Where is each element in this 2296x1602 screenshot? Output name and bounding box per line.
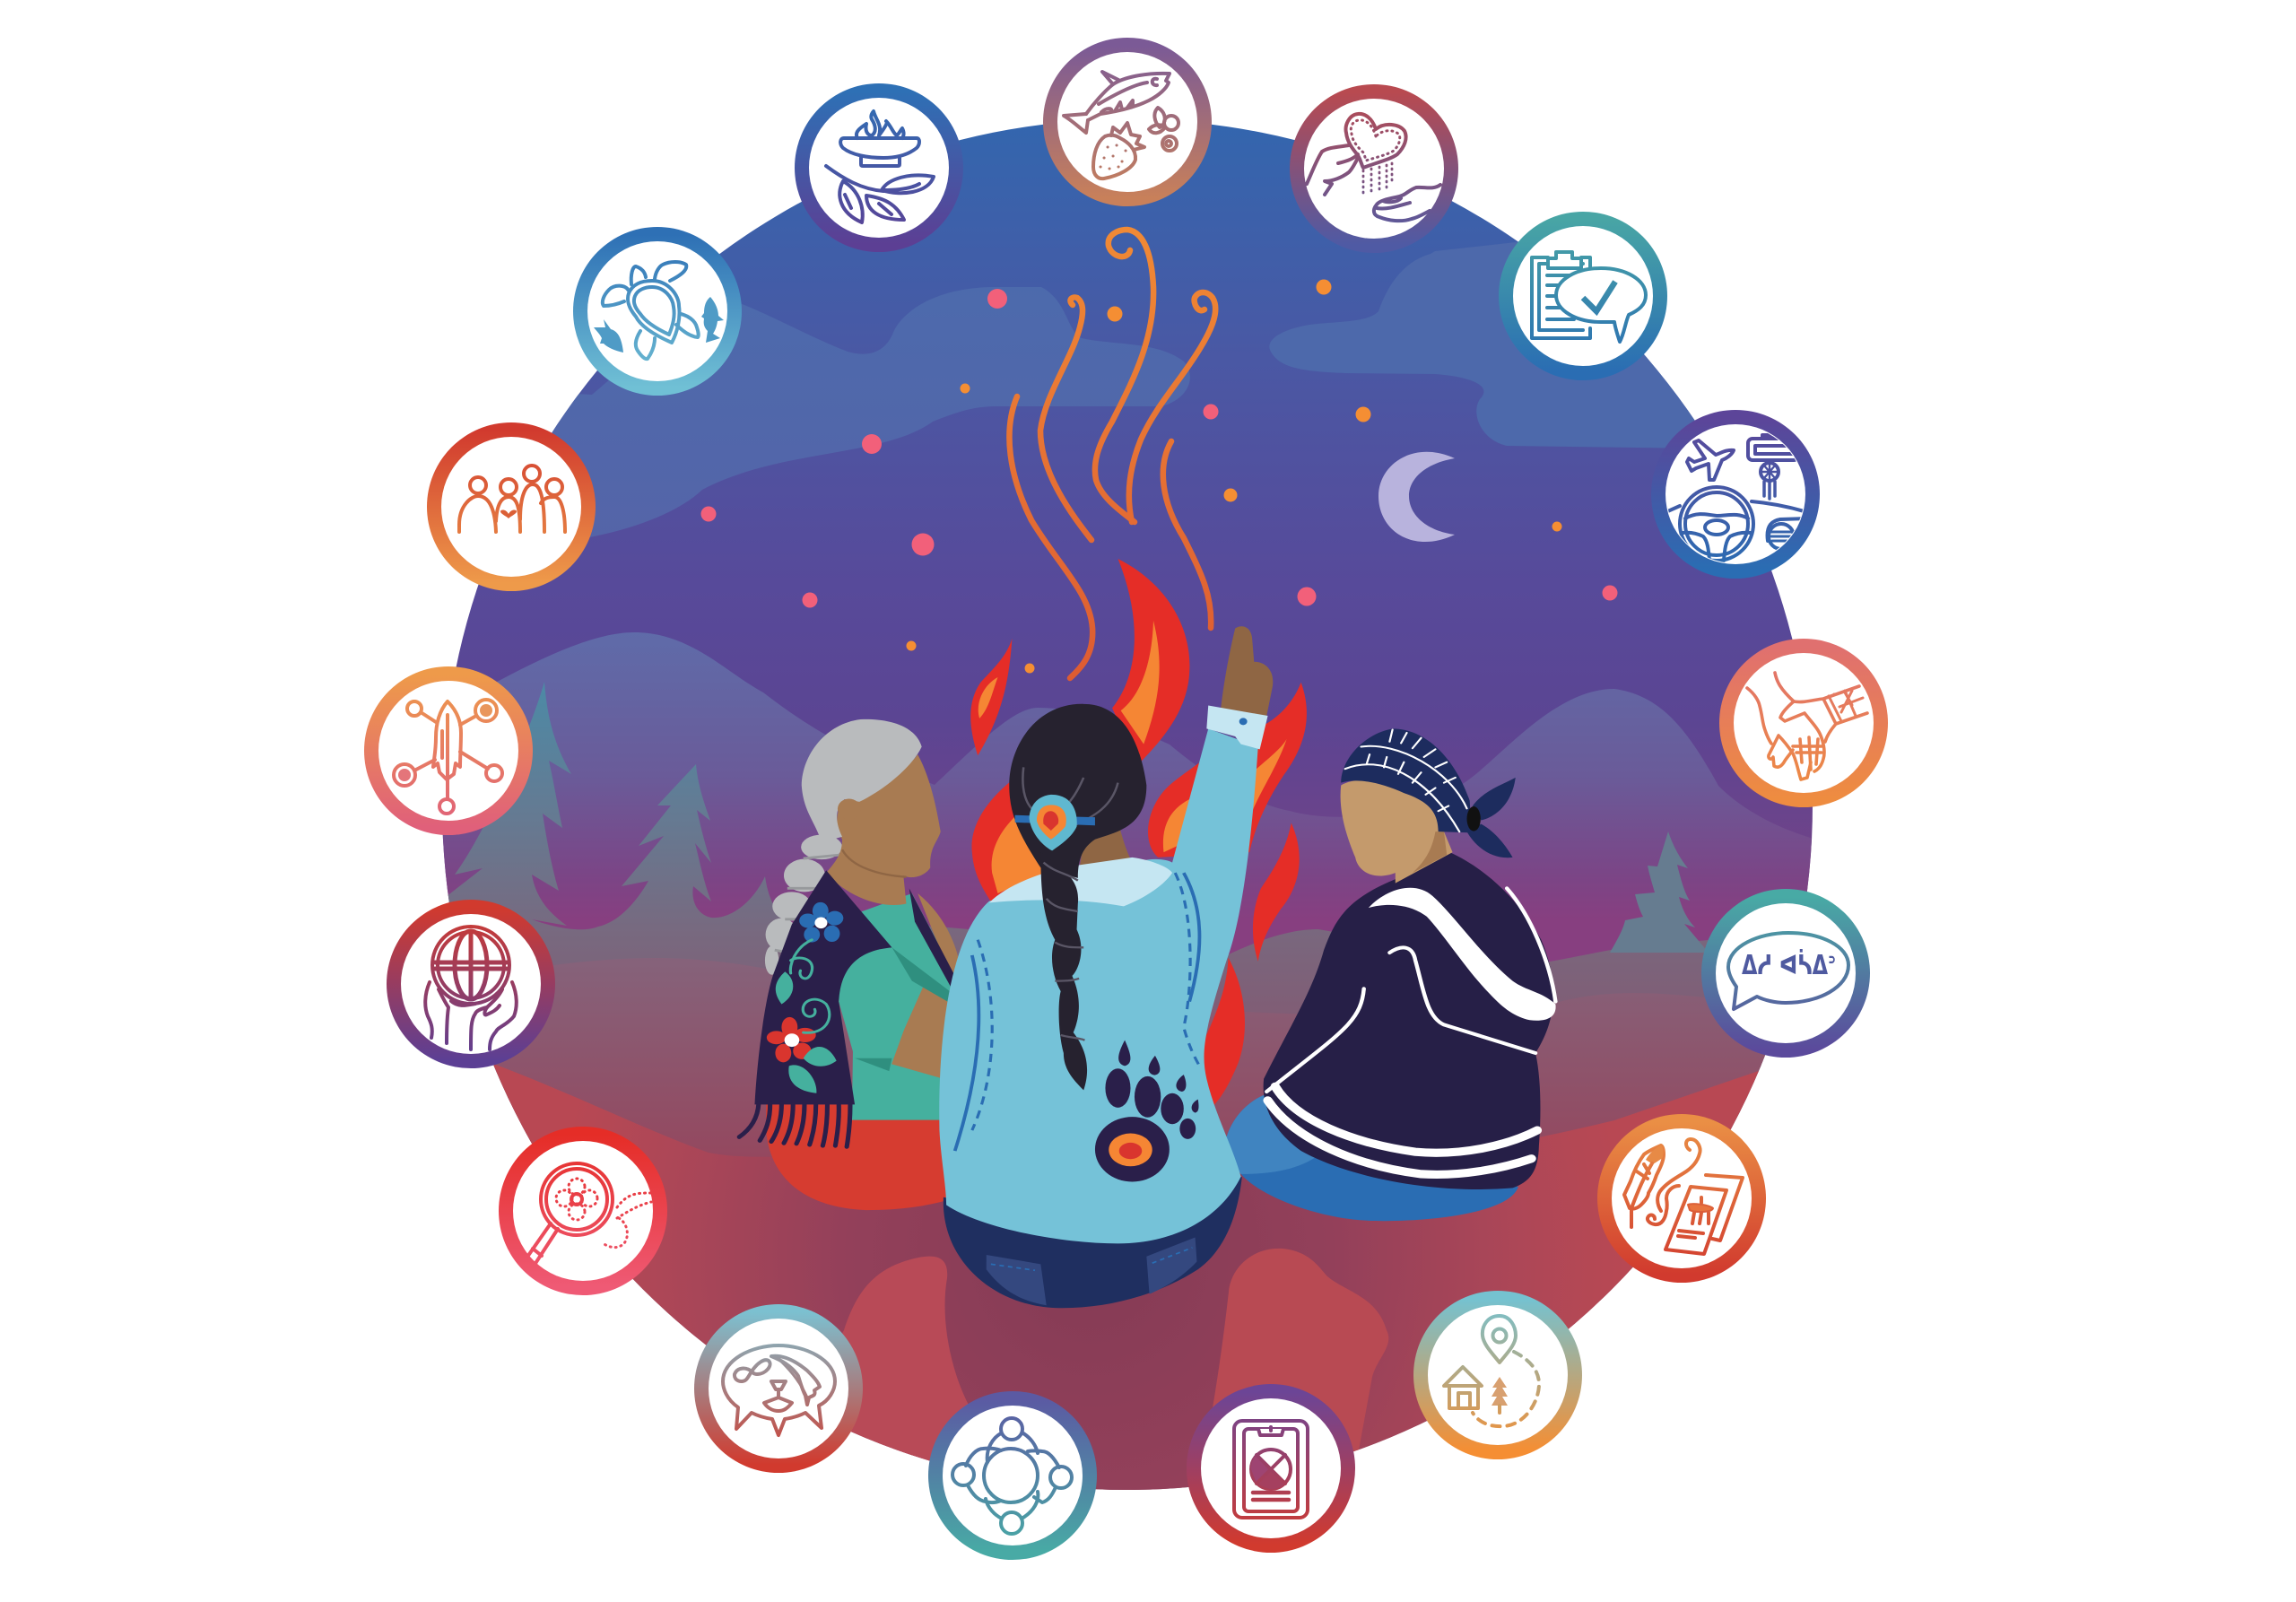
ground layer: middle: [493, 958, 1765, 1301]
raised hand: [1221, 626, 1273, 716]
cloud: right: [1270, 242, 1695, 448]
person: woman on the right: [1223, 728, 1556, 1221]
trees and left ground silhouette: [448, 682, 780, 1144]
badge: phone with pie chart: [1187, 1384, 1355, 1553]
cuff: [1206, 706, 1268, 749]
badge: magnifier and dotted flower: [499, 1127, 667, 1295]
beadwork flowers: [767, 902, 843, 1093]
parka trim: [1369, 888, 1556, 1021]
braid: [1040, 852, 1087, 1090]
cloud: left: [552, 287, 1190, 537]
headscarf: [1341, 728, 1472, 832]
badge: fire bowl and sage: [795, 83, 963, 252]
hair: [802, 719, 922, 842]
ground layer: far, right of the trees: [929, 926, 1765, 1130]
ear: [838, 798, 860, 819]
tree: right: [1610, 831, 1709, 953]
fire: [970, 559, 1307, 1110]
background scene disc: [422, 108, 1848, 1543]
sleeve and forearm: [889, 986, 955, 1079]
syllabics text: ᐃᓱ ᐊᓵᐃᐣ: [1742, 948, 1836, 981]
hill: right foreground: [1213, 1249, 1388, 1451]
mountains: [430, 632, 1848, 1076]
person: centre woman pointing: [939, 626, 1273, 1308]
fringe: [739, 1103, 850, 1146]
badge: syllabics speech bubble: [1701, 889, 1870, 1058]
collar: [989, 858, 1172, 906]
arm: [918, 893, 961, 986]
person: elder on the left: [739, 719, 961, 1210]
badge: plane and dashboard: [1651, 410, 1820, 579]
bear paw: [1095, 1040, 1198, 1182]
embers: [701, 289, 1618, 608]
badge: salmon and berries: [1043, 38, 1212, 206]
badge: people in a circle: [928, 1391, 1097, 1560]
people and fire: [739, 559, 1556, 1308]
parka: [1264, 852, 1553, 1189]
ground layer: foreground: [493, 1065, 1759, 1490]
neck: [1078, 822, 1135, 880]
badge: clasped hands: [1719, 639, 1888, 807]
knot: [1467, 806, 1481, 831]
hill: left foreground: [842, 1256, 969, 1460]
badge: clipboard with check: [1499, 212, 1667, 380]
trousers: [944, 1177, 1242, 1308]
sweater stitching: [955, 873, 1201, 1151]
badge: family with heart: [427, 422, 596, 591]
headscarf tails: [1473, 778, 1516, 821]
badge: hands giving heart: [1290, 84, 1458, 253]
sweater: [939, 728, 1258, 1243]
badge: globe held in hands: [387, 900, 555, 1068]
hair: [1009, 704, 1146, 878]
vest: [754, 870, 892, 1104]
smoke wisps: [1009, 230, 1215, 678]
head and neck: [826, 754, 941, 905]
head: [1341, 780, 1453, 884]
badge: location and house: [1413, 1291, 1582, 1459]
trousers: [1223, 1094, 1518, 1221]
badge: turtle and fish: [573, 227, 742, 396]
shirt: [852, 893, 958, 1120]
badge: feather swirl and documents: [1597, 1114, 1766, 1283]
hair tie: [1015, 815, 1095, 825]
badge: feather network: [364, 666, 533, 835]
braid: [765, 835, 842, 975]
moon: [1378, 452, 1455, 542]
badge: speech bubble with infinity and feather: [694, 1304, 863, 1473]
skirt: [766, 1104, 949, 1210]
badge ring: [364, 38, 1888, 1560]
